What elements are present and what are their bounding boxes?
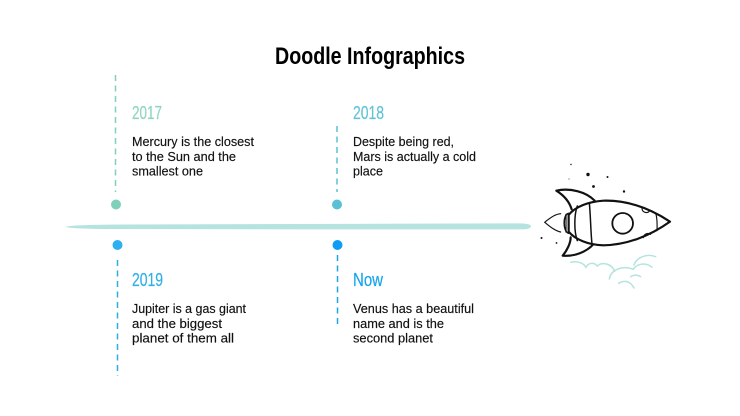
year 2019: 2019 xyxy=(132,270,163,290)
description 2017: smallest one xyxy=(132,164,203,178)
icon: smoke cloud xyxy=(571,255,656,288)
dashed connector Now xyxy=(336,255,338,325)
dot 2017 xyxy=(111,200,121,210)
title: Doodle Infographics xyxy=(275,43,465,70)
icon: stars xyxy=(540,164,625,244)
description 2019: Jupiter is a gas giant xyxy=(132,302,247,316)
engine bands xyxy=(564,203,592,244)
description 2018: Despite being red, xyxy=(353,135,454,149)
dashed connector 2017 xyxy=(114,75,116,192)
window xyxy=(612,213,633,234)
year 2017: 2017 xyxy=(132,103,162,123)
milestone: 2019 xyxy=(112,240,247,376)
description 2017 xyxy=(132,135,255,178)
milestone: 2018 xyxy=(332,103,476,210)
description Now: Venus has a beautiful xyxy=(353,302,474,316)
dot 2019 xyxy=(112,240,122,250)
description 2019: and the biggest xyxy=(132,317,223,331)
description 2018: Mars is actually a cold xyxy=(353,150,476,164)
description Now: second planet xyxy=(353,332,434,346)
dashed connector 2019 xyxy=(116,260,118,376)
year Now: Now xyxy=(353,270,384,290)
timeline bar xyxy=(65,223,531,229)
milestone: Now xyxy=(332,240,474,346)
flame xyxy=(545,214,561,232)
description 2019 xyxy=(132,302,247,346)
description 2017: Mercury is the closest xyxy=(132,135,255,149)
rivets xyxy=(642,209,651,238)
upper fin xyxy=(556,190,595,209)
dashed connector 2018 xyxy=(336,126,338,192)
description Now xyxy=(353,302,474,346)
nose line xyxy=(656,214,657,231)
lower fin xyxy=(563,237,593,256)
year 2018: 2018 xyxy=(353,103,384,123)
description Now: name and is the xyxy=(353,317,444,331)
milestone: 2017 xyxy=(111,75,255,210)
dot Now xyxy=(332,240,342,250)
description 2018: place xyxy=(353,164,383,178)
dot 2018 xyxy=(332,200,342,210)
description 2018 xyxy=(353,135,476,178)
rocket body xyxy=(569,201,670,245)
icon: rocket xyxy=(545,190,670,256)
description 2017: to the Sun and the xyxy=(132,150,236,164)
description 2019: planet of them all xyxy=(132,332,234,346)
